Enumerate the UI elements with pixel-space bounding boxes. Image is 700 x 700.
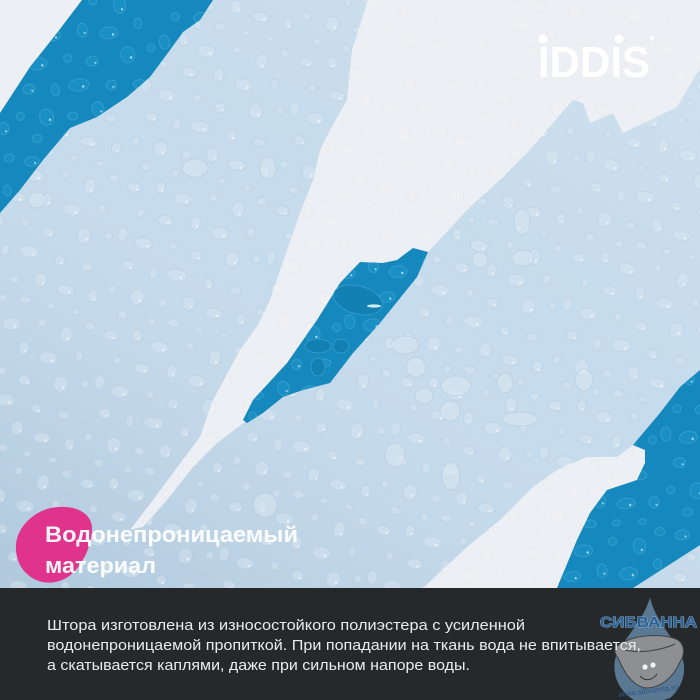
heading: материал xyxy=(45,553,156,578)
icon: smiling bathtub xyxy=(615,636,684,688)
blue fabric stripe: bottom right xyxy=(557,370,700,588)
description text: водонепроницаемой пропиткой. При попадании на ткань вода не впитывается, xyxy=(47,637,641,654)
white fabric stripe: bottom right xyxy=(423,445,645,588)
logo: IDDIS: IDDIS xyxy=(538,38,650,87)
description text xyxy=(47,617,641,674)
white fabric stripe: central diagonal and top right xyxy=(130,0,700,530)
icon: water drop xyxy=(614,597,684,700)
website url: www.sibvanna.ru xyxy=(617,683,679,699)
description text: Штора изготовлена из износостойкого полиэстера с усиленной xyxy=(47,617,525,634)
description text: а скатывается каплями, даже при сильном напоре воды. xyxy=(47,657,470,674)
heading xyxy=(45,522,298,578)
watermark: Sibvanna logo xyxy=(600,597,698,700)
blue fabric patch: centre with drops xyxy=(243,248,428,423)
dark text panel xyxy=(0,588,700,700)
white fabric stripe: top left xyxy=(0,0,82,113)
heading: Водонепроницаемый xyxy=(45,522,298,547)
large water drops on light fabric xyxy=(28,157,593,517)
blue fabric stripe: top left xyxy=(0,0,213,213)
pink blob behind heading xyxy=(16,507,92,583)
brand name: СИБВАННА xyxy=(600,615,698,631)
